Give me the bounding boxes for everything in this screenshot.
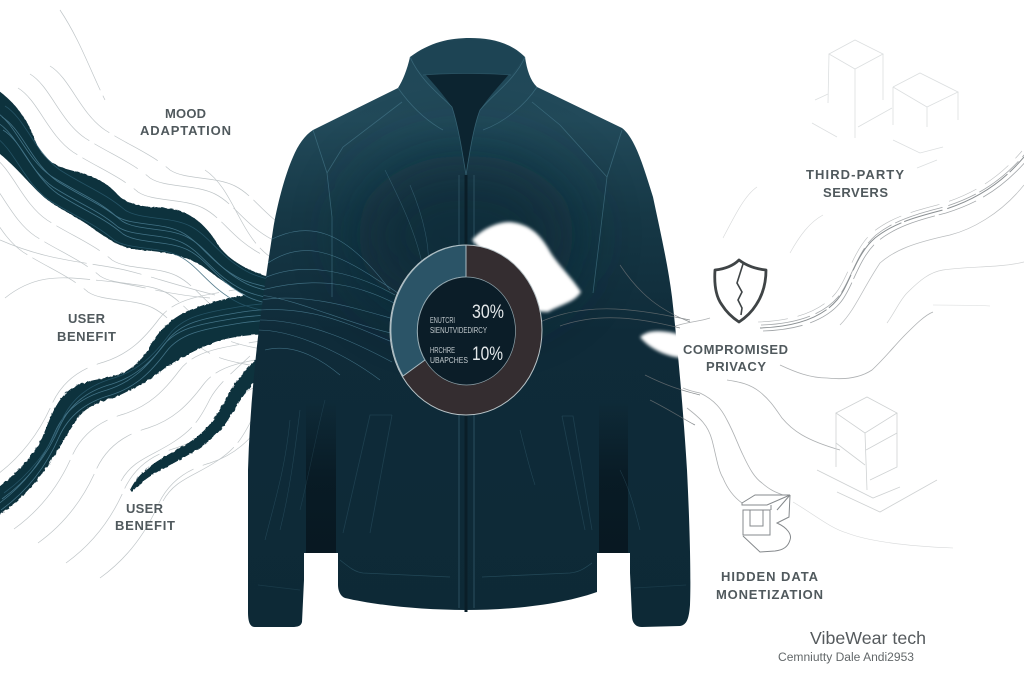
zipper <box>459 175 474 612</box>
label: user benefit left: USER <box>68 311 106 326</box>
icon: hidden data box <box>742 495 790 552</box>
donut caption: upper: ENUTCRI <box>430 316 455 325</box>
label: user benefit lower: BENEFIT <box>115 518 175 533</box>
donut label: 30%: 30% <box>472 302 504 323</box>
donut ring: dark segment <box>390 245 542 415</box>
label: compromised privacy: COMPROMISED <box>683 342 788 357</box>
collar back <box>412 40 523 75</box>
donut caption: lower: HRCHRE <box>430 346 455 355</box>
blue highlights in the streams <box>0 106 405 510</box>
donut centre <box>418 277 516 385</box>
jacket silhouette <box>248 38 690 627</box>
label: compromised privacy <box>683 342 788 374</box>
icon: server sketch <box>812 40 958 168</box>
label: third-party servers <box>806 167 904 200</box>
donut chart <box>390 245 542 415</box>
donut ring: teal segment <box>391 245 466 376</box>
label: third-party servers: THIRD-PARTY <box>806 167 904 182</box>
right flow lines <box>673 151 1024 548</box>
donut caption: upper second line: SIENUTVIDEDIRCY <box>430 326 488 335</box>
left data stream: thin user benefit strand <box>130 358 264 492</box>
left fine flow lines <box>0 10 500 578</box>
label: third-party servers: SERVERS <box>823 185 888 200</box>
icon: broken shield <box>715 260 766 322</box>
label: mood adaptation <box>140 106 231 138</box>
donut caption: lower second line: UBAPCHES <box>430 356 468 365</box>
jacket seams <box>258 57 686 590</box>
jacket shading <box>306 155 628 555</box>
label: compromised privacy: PRIVACY <box>706 359 766 374</box>
label: user benefit left: BENEFIT <box>57 329 116 344</box>
brand tagline: Cemniutty Dale Andi2953 <box>778 652 914 664</box>
label: hidden data monetization: HIDDEN DATA <box>721 569 819 584</box>
left data stream: user benefit <box>0 285 330 518</box>
icon: cube sketch <box>817 397 937 512</box>
neck opening <box>418 66 516 175</box>
label: mood adaptation: ADAPTATION <box>140 123 231 138</box>
label: user benefit lower <box>115 501 175 533</box>
label: user benefit left <box>57 311 116 344</box>
right fibres crossing the jacket <box>540 265 700 425</box>
label: user benefit lower: USER <box>126 501 164 516</box>
jacket <box>248 38 700 627</box>
brand name: VibeWear tech <box>810 628 926 648</box>
label: mood adaptation: MOOD <box>165 106 206 121</box>
white dissolve patches on jacket <box>472 222 695 358</box>
label: hidden data monetization: MONETIZATION <box>716 587 823 602</box>
label: hidden data monetization <box>716 569 823 602</box>
left data stream: mood adaptation <box>0 88 330 322</box>
jacket fibres <box>258 170 640 540</box>
donut label: 10%: 10% <box>472 344 503 365</box>
